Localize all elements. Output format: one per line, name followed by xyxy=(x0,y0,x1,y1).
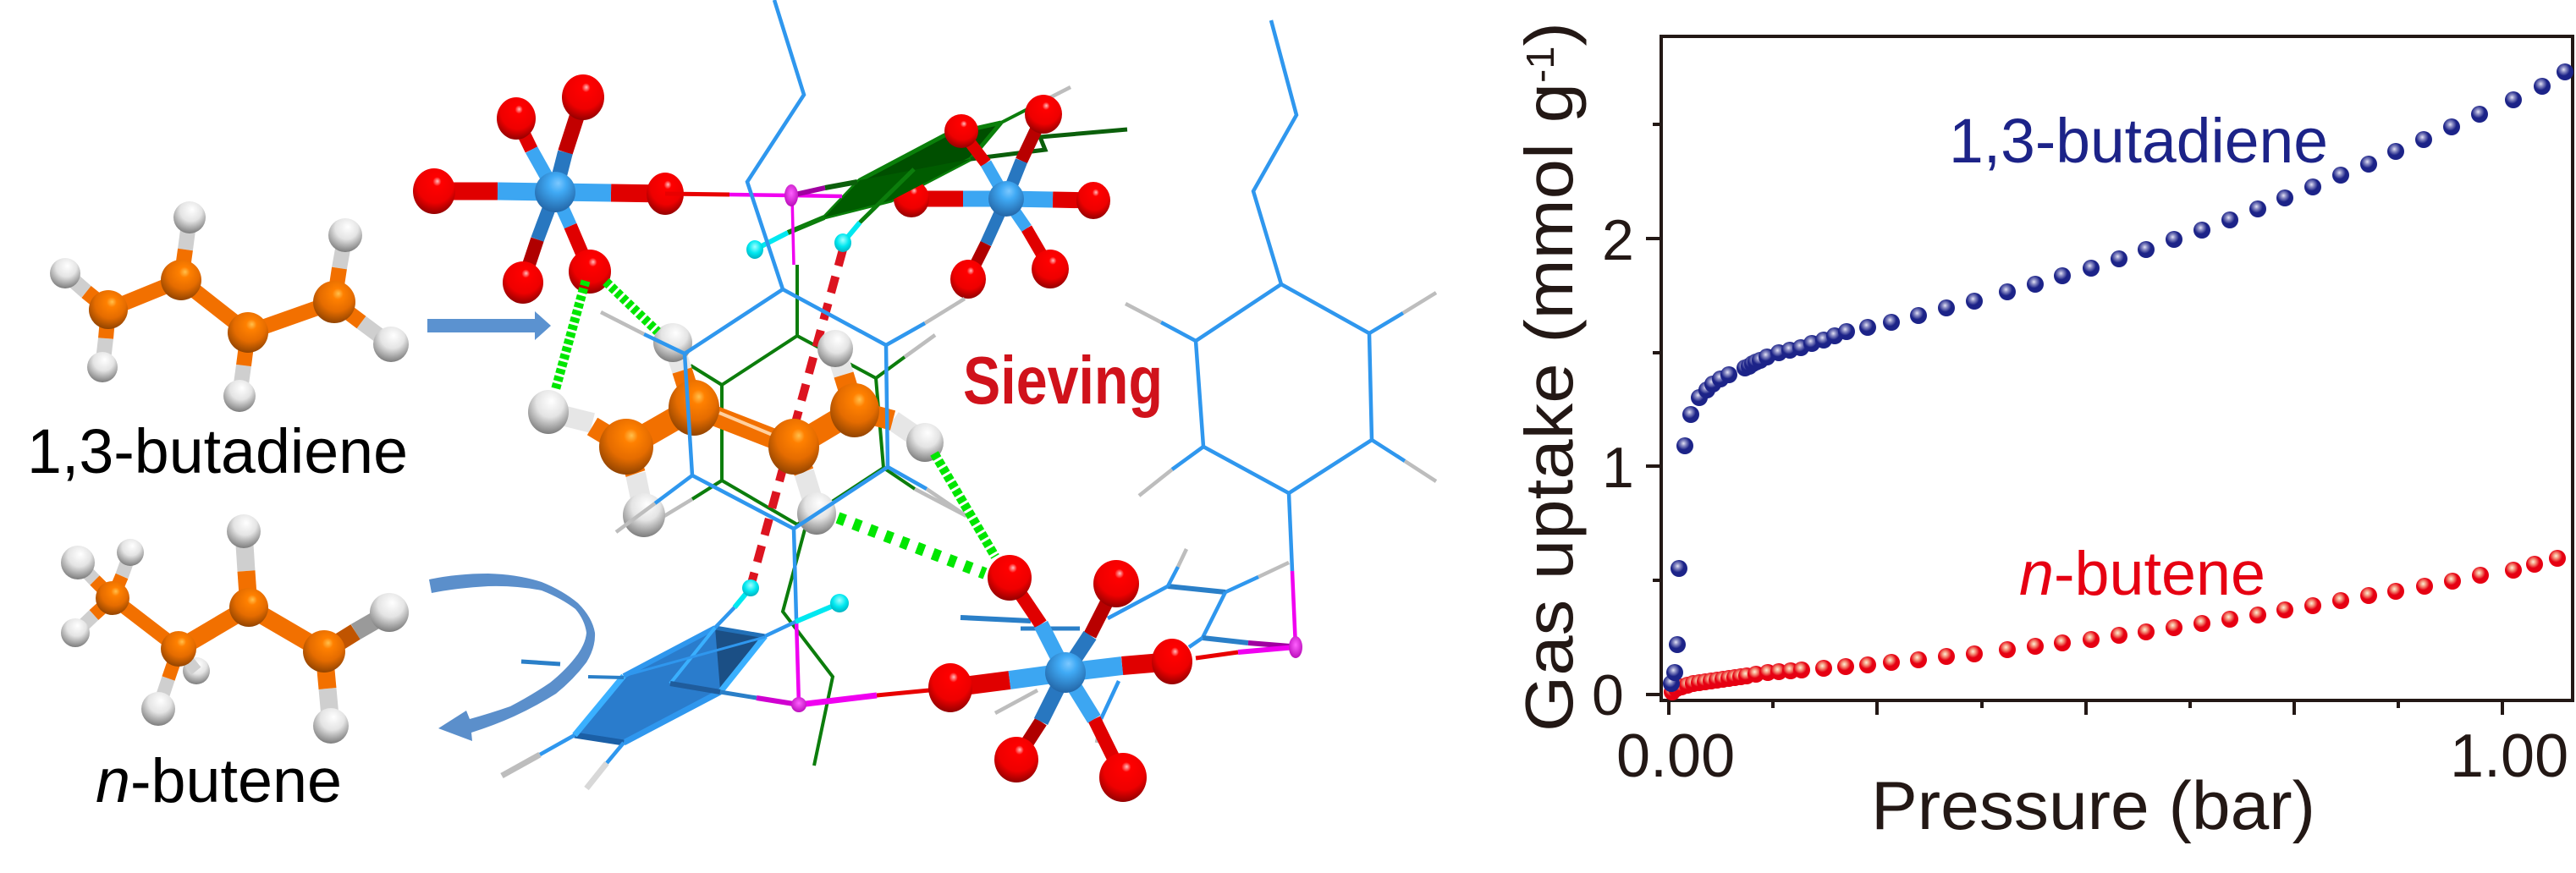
sieving red dashed interaction xyxy=(751,250,843,586)
y axis title: -1 xyxy=(1519,46,1563,83)
series label: n-butene: n-butene xyxy=(2019,540,2265,608)
guest: 1,3-butadiene bound in pore xyxy=(528,323,944,537)
x tick labels xyxy=(1616,722,2568,790)
framework: central blue linker xyxy=(601,0,966,705)
y tick labels: 2 xyxy=(1602,208,1634,272)
y tick labels: 0 xyxy=(1592,663,1624,728)
series label: 1,3-butadiene: 1,3-butadiene xyxy=(1949,106,2328,176)
icon: n-butene ball-and-stick molecule xyxy=(61,514,409,744)
framework: lower blue linker plane xyxy=(502,579,849,788)
upper linker magenta metal site xyxy=(665,182,857,265)
label: Sieving: Sieving xyxy=(963,343,1163,418)
x tick labels: 0.00 xyxy=(1616,722,1735,790)
label: 1,3-butadiene: 1,3-butadiene xyxy=(27,416,408,486)
chart: gas uptake isotherm xyxy=(1511,22,2573,844)
arrow: butadiene enters pore xyxy=(427,311,551,340)
y tick labels xyxy=(1592,208,1634,728)
y tick labels: 1 xyxy=(1602,436,1634,500)
arrow: n-butene rejected curved xyxy=(429,574,595,741)
hydrogen-bond green dashes xyxy=(555,281,995,574)
label: n-butene: n-butene xyxy=(96,747,342,815)
series: n-butene points xyxy=(1664,550,2566,700)
x tick labels: 1.00 xyxy=(2450,722,2568,790)
metal node: upper right octahedron xyxy=(894,95,1110,299)
x axis title: Pressure (bar) xyxy=(1871,768,2315,844)
metal node: upper left octahedron xyxy=(413,74,684,304)
icon: 1,3-butadiene ball-and-stick molecule xyxy=(50,201,409,412)
framework: green back organic linker xyxy=(664,87,1127,766)
framework: right blue organic linker xyxy=(1126,20,1436,647)
upper green linker front edge and cyan hydrogens xyxy=(746,159,971,259)
y axis title: ) xyxy=(1511,22,1587,46)
y axis title: Gas uptake (mmol g xyxy=(1511,83,1587,732)
chart frame and axes xyxy=(1646,36,2573,715)
framework: lower right linker behind metal node xyxy=(960,549,1291,743)
metal node: lower octahedron xyxy=(791,555,1302,802)
series: 1,3-butadiene points xyxy=(1663,63,2573,692)
